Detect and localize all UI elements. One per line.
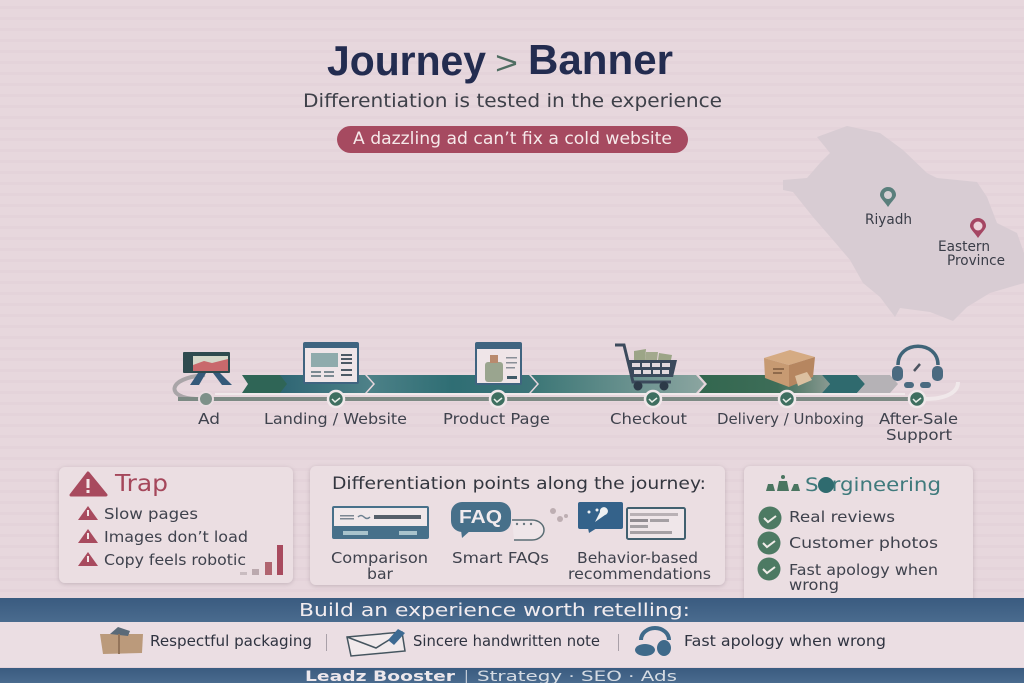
icon: delivery box (764, 350, 815, 387)
journey nodes (199, 391, 925, 407)
panel: trap (59, 467, 293, 583)
callout pill: A dazzling ad can’t fix a cold website (353, 129, 672, 148)
label: Eastern Province (938, 239, 1005, 269)
journey labels: Support (886, 426, 952, 444)
icon: packaging (100, 627, 143, 654)
journey band (175, 375, 958, 401)
icon: Eastern Province pin (970, 218, 986, 238)
text: fast apology: Fast apology when wrong (684, 632, 886, 650)
label: Riyadh: Riyadh (865, 212, 912, 228)
strip: experience items (0, 622, 1024, 667)
callout pill (337, 126, 688, 153)
icon: apology (635, 628, 671, 656)
label: behavior-based recommendations: Behavior-based (577, 549, 698, 567)
banner: build an experience: Build an experience worth retelling: (299, 600, 690, 621)
engineering list: Real reviews (789, 508, 895, 526)
journey labels: Delivery / Unboxing (717, 410, 864, 428)
label: behavior-based recommendations (568, 549, 711, 583)
engineering list (758, 506, 938, 594)
text: handwritten note: Sincere handwritten note (413, 632, 600, 650)
label: behavior-based recommendations: recommendations (568, 565, 711, 583)
icon: large warning (71, 473, 106, 495)
icon: comparison bar (332, 506, 429, 539)
trap list: Slow pages (104, 505, 198, 523)
heading: engineering: Sorgineering (805, 474, 941, 496)
label: smart FAQs: Smart FAQs (452, 549, 549, 567)
icon: browser window (303, 342, 359, 384)
label: Eastern Province: Province (947, 253, 1005, 269)
icon: FAQ bubbles (451, 502, 568, 540)
label: Eastern Province: Eastern (938, 239, 990, 255)
journey labels (198, 410, 958, 444)
panel: engineering (744, 466, 973, 606)
journey labels: Ad (198, 410, 220, 428)
label: comparison bar: Comparison (331, 549, 428, 567)
heading: trap: Trap (114, 471, 168, 497)
bar chart (240, 545, 283, 575)
icon: shopping cart (615, 345, 677, 390)
engineering list: wrong (789, 576, 839, 594)
icon: Riyadh pin (880, 187, 896, 207)
trap list: Images don’t load (104, 528, 248, 546)
icon: product page (475, 342, 522, 385)
heading: engineering (766, 474, 941, 496)
footer (0, 668, 1024, 683)
icon: ad monitor (183, 352, 232, 385)
panel: differentiation points (310, 466, 725, 585)
trap list: Copy feels robotic (104, 551, 246, 569)
title (327, 36, 673, 84)
icon: recommendations (578, 502, 685, 539)
trap list (78, 505, 248, 569)
map: Saudi Arabia (783, 126, 1024, 321)
journey labels: Product Page (443, 410, 550, 428)
journey labels: Landing / Website (264, 410, 407, 428)
text: respectful packaging: Respectful packaging (150, 632, 312, 650)
journey labels: After-Sale (879, 410, 958, 428)
label: comparison bar (331, 549, 428, 583)
icon: FAQ bubbles: FAQ (459, 507, 502, 527)
title: Banner (528, 36, 673, 83)
engineering list: Fast apology when (789, 561, 938, 579)
icon: headset (892, 346, 943, 388)
title: > (495, 45, 518, 81)
banner: build an experience (0, 598, 1024, 622)
title: Journey (327, 37, 487, 84)
label: comparison bar: bar (367, 565, 394, 583)
icon: envelope (347, 629, 405, 656)
journey labels: Checkout (610, 410, 687, 428)
engineering list: Customer photos (789, 534, 938, 552)
subtitle: Differentiation is tested in the experience (303, 90, 722, 112)
heading: differentiation: Differentiation points along the journey: (332, 474, 706, 494)
